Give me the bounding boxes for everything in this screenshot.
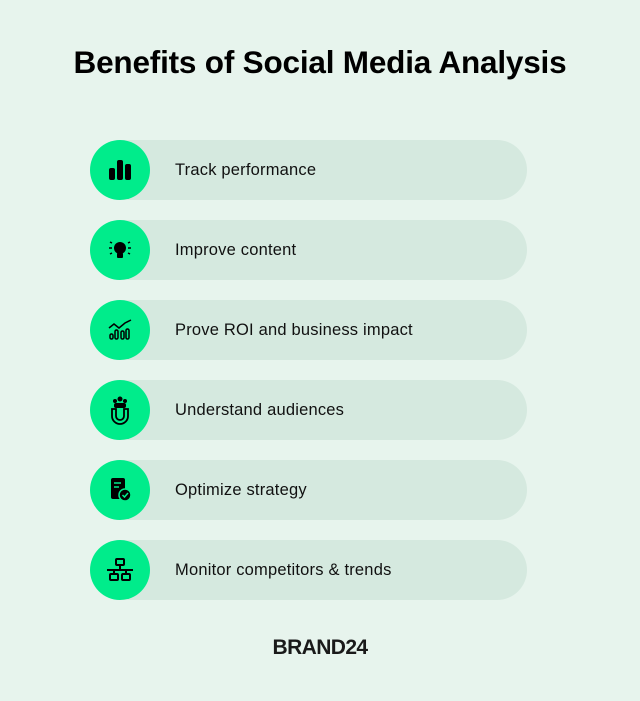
- text: Prove ROI and business impact: [175, 321, 413, 339]
- row: prove ROI: [90, 300, 527, 360]
- icon: network: [90, 540, 150, 600]
- text: Optimize strategy: [175, 481, 307, 499]
- text: Monitor competitors & trends: [175, 561, 392, 579]
- icon: bar chart: [90, 140, 150, 200]
- title: Benefits of Social Media Analysis: [74, 44, 566, 80]
- text: Understand audiences: [175, 401, 344, 419]
- icon: lightbulb: [90, 220, 150, 280]
- row: optimize strategy: [90, 460, 527, 520]
- text: Improve content: [175, 241, 296, 259]
- icon: trend: [90, 300, 150, 360]
- row: improve content: [90, 220, 527, 280]
- row: monitor competitors: [90, 540, 527, 600]
- icon: magnet audience: [90, 380, 150, 440]
- text: Track performance: [175, 161, 316, 179]
- row: understand audiences: [90, 380, 527, 440]
- logo: BRAND24: [272, 636, 368, 659]
- row: track performance: [90, 140, 527, 200]
- icon: document check: [90, 460, 150, 520]
